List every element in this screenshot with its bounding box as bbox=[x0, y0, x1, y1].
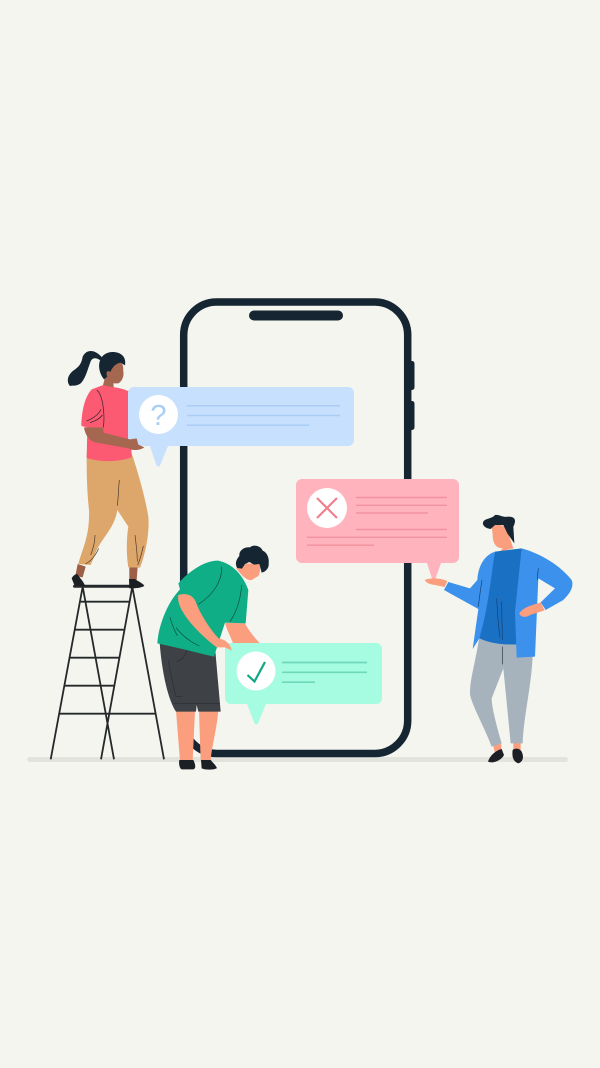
woman legs bbox=[75, 564, 138, 580]
inner shirt bbox=[479, 548, 522, 644]
cardigan left side and sleeve bbox=[444, 552, 495, 649]
man face bbox=[236, 563, 260, 580]
man near arm reaching bubble bbox=[178, 594, 232, 651]
man far arm bbox=[225, 623, 260, 644]
man legs bbox=[176, 711, 218, 761]
man shoes bbox=[179, 760, 217, 770]
icon: check mark bbox=[236, 652, 276, 690]
phone speaker notch bbox=[249, 310, 343, 320]
hand open under bubble bbox=[425, 578, 447, 587]
blue man face and neck bbox=[492, 525, 513, 552]
cardigan right side and sleeve bbox=[515, 548, 572, 658]
green bubble text lines bbox=[282, 662, 367, 682]
icon: question mark bbox=[139, 395, 178, 434]
woman arm holding bubble bbox=[84, 427, 144, 450]
blue question speech bubble bbox=[128, 387, 354, 467]
blue man shoes bbox=[488, 749, 523, 763]
woman face and neck bbox=[103, 362, 124, 389]
man hair bbox=[236, 546, 269, 573]
step ladder bbox=[51, 585, 164, 759]
woman trousers bbox=[78, 453, 149, 568]
green check speech bubble bbox=[225, 643, 382, 725]
man green shirt bbox=[157, 561, 248, 657]
man in blue cardigan bbox=[425, 515, 572, 763]
pink cross speech bubble bbox=[296, 479, 459, 580]
phone side button lower bbox=[408, 401, 414, 430]
ankles bbox=[493, 742, 521, 753]
ponytail bbox=[68, 351, 102, 386]
blue man trousers bbox=[470, 637, 533, 747]
woman shoes bbox=[72, 574, 144, 588]
icon: question mark: ? bbox=[150, 400, 167, 432]
woman standing on ladder bbox=[68, 351, 149, 588]
man in green shirt bbox=[157, 546, 269, 770]
icon: cross mark bbox=[307, 488, 347, 528]
shorts folds bbox=[168, 650, 220, 703]
hand on hip bbox=[519, 602, 545, 617]
phone outline bbox=[184, 302, 414, 754]
phone side button upper bbox=[408, 361, 414, 390]
man shorts bbox=[159, 638, 221, 712]
woman hair bbox=[99, 352, 125, 379]
ground line bbox=[27, 757, 568, 762]
trouser crease bbox=[501, 647, 503, 664]
pink bubble text lines bbox=[307, 498, 447, 545]
blue bubble text lines bbox=[187, 406, 340, 425]
cardigan and shirt folds bbox=[478, 568, 538, 640]
shirt folds bbox=[170, 567, 242, 646]
woman shirt bbox=[81, 385, 132, 461]
trouser folds bbox=[85, 480, 143, 565]
blue man hair bbox=[483, 515, 515, 543]
shirt folds bbox=[87, 390, 104, 427]
